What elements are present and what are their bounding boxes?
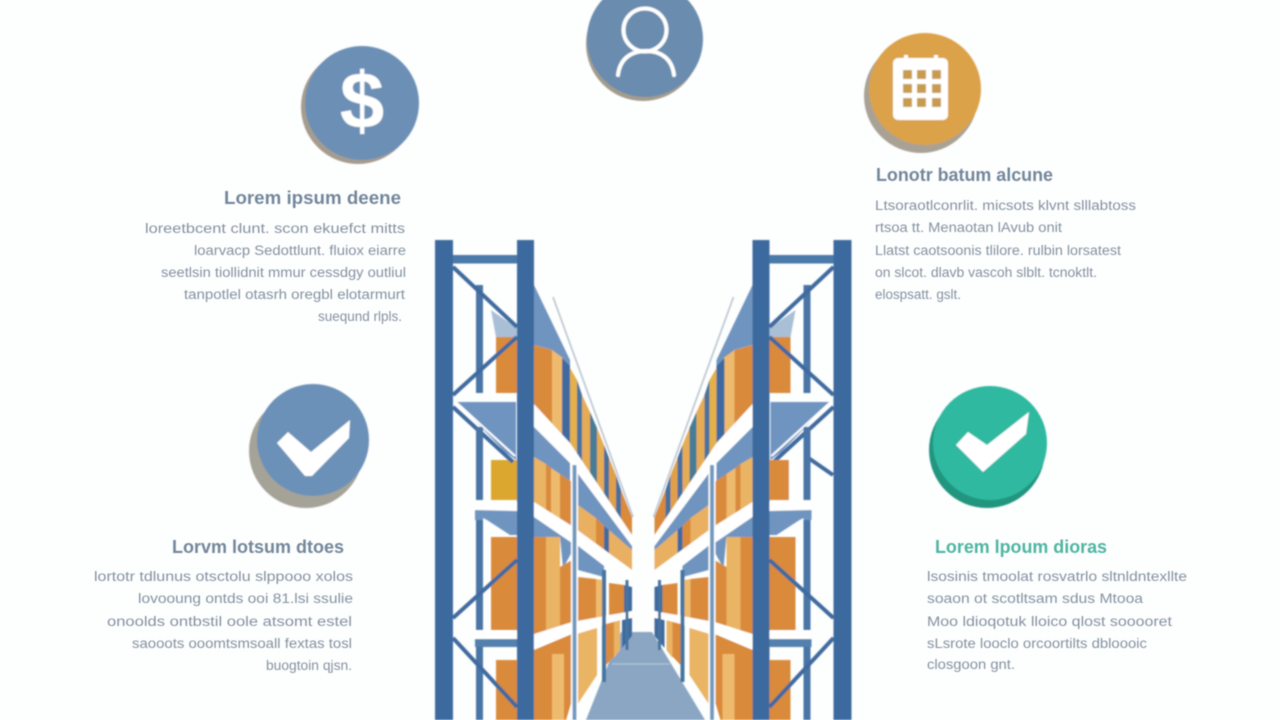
illustration: warehouse aisle with pallet racks (435, 240, 852, 720)
text block: confirmation: sLsrote looclo orcoortilts dbloooic (927, 636, 1147, 651)
text block: approval: saooots ooomtsmsoall fextas tosl (132, 636, 352, 651)
text block: approval: buogtoin qjsn. (266, 658, 352, 673)
text block: schedule: on slcot. dlavb vascoh slblt. tcnoktlt. (875, 265, 1097, 280)
item: confirmation, bottom right (927, 386, 1187, 672)
text block: schedule (875, 198, 1136, 302)
text block: approval: lovooung ontds ooi 81.lsi ssulie (138, 591, 353, 606)
text block: pricing: tanpotlel otasrh oregbl elotarmurt (184, 287, 405, 302)
right pallet rack (654, 240, 852, 720)
item: pricing, top left (145, 46, 419, 324)
text block: pricing: loarvacp Sedottlunt. fluiox eiarre (194, 243, 406, 258)
text block: confirmation: closgoon gnt. (927, 657, 1015, 672)
item: approval, bottom left (94, 384, 369, 673)
heading: schedule: Lonotr batum alcune (876, 165, 1053, 185)
icon: dollar coin (301, 46, 419, 164)
text block: schedule: Ltsoraotlconrlit. micsots klvnt slllabtoss (875, 198, 1136, 213)
icon: user profile, top centre (586, 0, 703, 101)
text block: confirmation: Moo ldioqotuk lloico qlost sooooret (927, 614, 1172, 629)
icon: blue check mark (249, 384, 369, 508)
item: schedule, top right (864, 33, 1136, 302)
heading: approval: Lorvm lotsum dtoes (172, 537, 344, 557)
text block: pricing: loreetbcent clunt. scon ekuefct mitts (145, 221, 405, 236)
icon: green check mark (929, 386, 1047, 508)
heading: confirmation: Lorem lpoum dioras (935, 537, 1107, 557)
left pallet rack (435, 240, 633, 720)
text block: confirmation (927, 569, 1187, 672)
text block: confirmation: soaon ot scotltsam sdus Mtooa (927, 591, 1144, 606)
text block: approval (94, 569, 353, 673)
text block: approval: lortotr tdlunus otsctolu slppooo xolos (94, 569, 353, 584)
text block: pricing (145, 221, 406, 324)
heading: pricing: Lorem ipsum deene (224, 188, 401, 208)
text block: confirmation: lsosinis tmoolat rosvatrlo sltnldntexllte (927, 569, 1187, 584)
icon: dollar coin: $ (340, 56, 384, 145)
text block: pricing: seetlsin tiollidnit mmur cessdgy outliul (161, 265, 406, 280)
text block: schedule: Llatst caotsoonis tlilore. rulbin lorsatest (875, 243, 1121, 258)
text block: schedule: elospsatt. gslt. (875, 287, 961, 302)
text block: schedule: rtsoa tt. Menaotan lAvub onit (875, 220, 1062, 235)
floor of the aisle (586, 632, 705, 720)
text block: approval: onoolds ontbstil oole atsomt estel (107, 614, 352, 629)
text block: pricing: sueqund rlpls. (318, 309, 402, 324)
icon: calendar (864, 33, 981, 153)
